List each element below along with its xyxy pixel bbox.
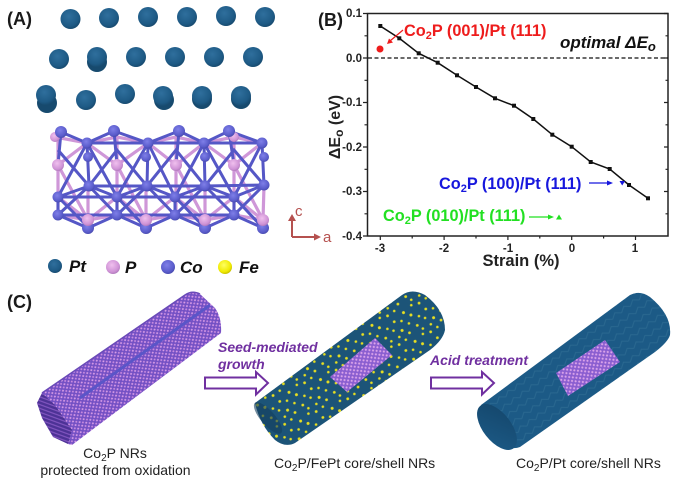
tick labels: -1 — [503, 243, 514, 255]
label A: (A) — [7, 9, 32, 29]
label B: (B) — [318, 10, 343, 30]
label: acid treatment: Acid treatment — [429, 352, 529, 368]
label C: (C) — [7, 292, 32, 312]
data series — [378, 24, 650, 200]
annotation: Co2P (100)/Pt (111): Co — [439, 175, 461, 193]
axis indicator c-a: a — [323, 229, 332, 246]
annotation: Co2P (010)/Pt (111): P (010)/Pt (111) — [411, 207, 525, 225]
label: seed-mediated growth: growth — [217, 356, 265, 372]
annotation: optimal delta E: optimal ΔE — [560, 33, 648, 52]
tick labels: -0.1 — [342, 97, 363, 109]
legend: atom types: Pt — [69, 257, 87, 276]
caption: Co2P/Pt core/shell NRs: P/Pt core/shell NRs — [539, 455, 661, 471]
caption: Co2P NRs: 2 — [101, 453, 107, 464]
exposed core window — [330, 338, 392, 392]
caption: Co2P/FePt core/shell NRs: 2 — [292, 463, 298, 474]
annotation: Co2P (100)/Pt (111): 2 — [461, 183, 467, 195]
caption: Co2P NRs: P NRs — [107, 445, 147, 461]
nanorod: Co2P — [37, 292, 221, 445]
axis titles: Strain (%) — [482, 252, 560, 270]
Pt atom layers — [36, 6, 275, 113]
annotation: optimal delta E: o — [648, 39, 656, 54]
nanorod: Co2P/FePt core/shell — [250, 292, 445, 445]
legend: atom types: Co — [180, 258, 203, 277]
Co2P crystal lattice — [50, 125, 270, 234]
caption: Co2P/FePt core/shell NRs: Co — [274, 455, 292, 471]
tick labels: -0.4 — [342, 231, 363, 243]
panel A: atomic structure — [7, 6, 332, 277]
caption: Co2P NRs: Co — [83, 445, 101, 461]
tick labels: -2 — [439, 243, 449, 255]
annotation: Co2P (100)/Pt (111) — [439, 175, 625, 195]
tick labels — [342, 8, 639, 255]
plot frame and ticks — [363, 14, 668, 240]
tick labels: -0.3 — [342, 186, 362, 198]
caption: Co2P/Pt core/shell NRs: 2 — [534, 463, 540, 474]
exposed core window — [556, 340, 620, 396]
annotation: Co2P (001)/Pt (111) — [376, 22, 546, 52]
caption: Co2P/FePt core/shell NRs: P/FePt core/shell NRs — [297, 455, 435, 471]
arrow: seed-mediated growth — [205, 372, 268, 394]
panel B: strain chart — [318, 8, 668, 270]
zero reference line — [368, 57, 668, 59]
tick labels: 0 — [569, 243, 575, 255]
caption: Co2P/Pt core/shell NRs: Co — [516, 455, 534, 471]
tick labels: 0.0 — [346, 53, 362, 65]
legend: atom types: Fe — [239, 258, 259, 277]
axis indicator c-a — [288, 203, 332, 246]
annotation: Co2P (010)/Pt (111) — [383, 207, 562, 227]
annotation: Co2P (001)/Pt (111): 2 — [426, 30, 432, 42]
panel B: strain chart: ΔE — [327, 137, 344, 159]
nanorod: Co2P/Pt core/shell — [469, 293, 670, 457]
annotation: Co2P (010)/Pt (111): Co — [383, 207, 405, 225]
tick labels: -0.2 — [342, 142, 362, 154]
annotation: Co2P (100)/Pt (111): P (100)/Pt (111) — [467, 175, 581, 193]
legend: atom types — [48, 257, 259, 277]
tick labels: 1 — [632, 243, 639, 255]
tick labels: -3 — [375, 243, 385, 255]
panel C: nanorod synthesis — [7, 292, 670, 478]
panel B: strain chart: o — [332, 130, 346, 137]
caption: protected from oxidation: protected from oxidation — [40, 462, 191, 478]
annotation: Co2P (010)/Pt (111): 2 — [405, 215, 411, 227]
legend: atom types: P — [125, 258, 137, 277]
arrow: acid treatment — [431, 372, 494, 394]
tick labels: 0.1 — [346, 8, 363, 20]
axis indicator c-a: c — [295, 203, 303, 220]
label: seed-mediated growth: Seed-mediated — [218, 339, 318, 355]
annotation: Co2P (001)/Pt (111): Co — [404, 22, 426, 40]
annotation: Co2P (001)/Pt (111): P (001)/Pt (111) — [432, 22, 546, 40]
label: seed-mediated growth — [217, 339, 318, 372]
panel B: strain chart: (eV) — [327, 95, 344, 130]
